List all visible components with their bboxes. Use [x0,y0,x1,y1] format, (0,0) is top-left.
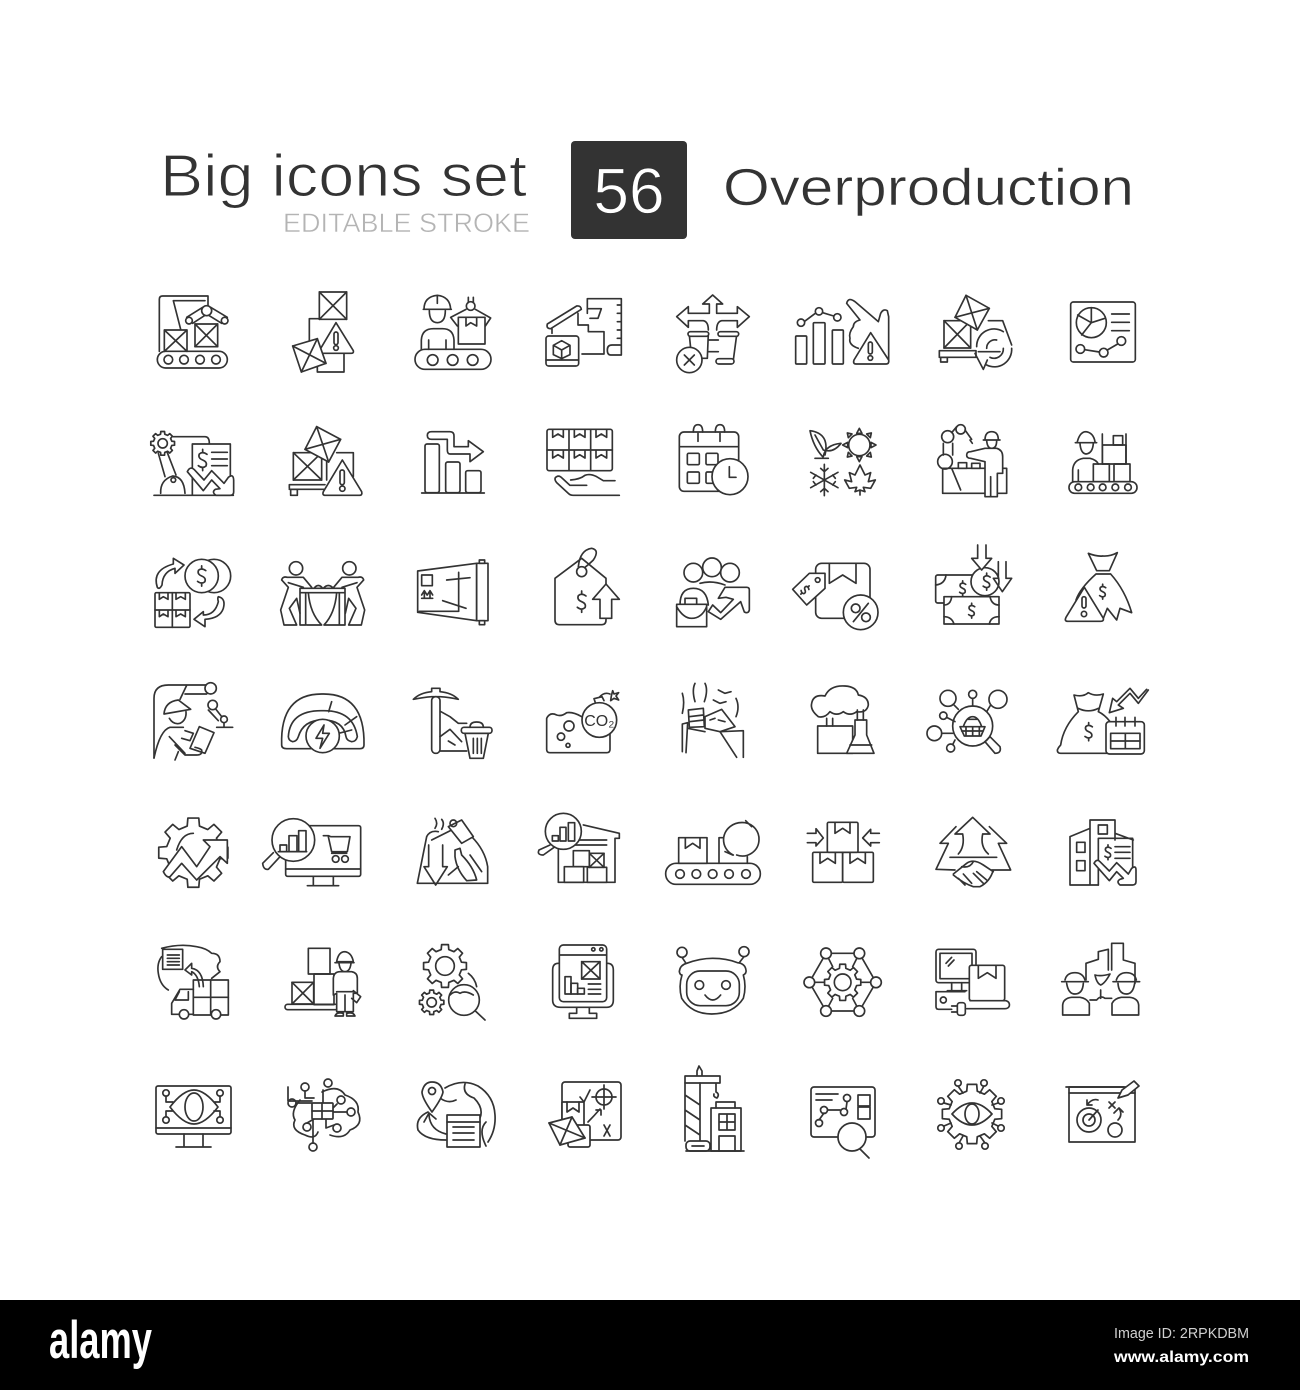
icon: price tag rising [555,548,619,625]
icon: globe with location and document [417,1082,495,1147]
icon: gear network [804,948,881,1016]
icon: monitor with eye [156,1086,231,1147]
subtitle: editable stroke: EDITABLE STROKE [283,208,530,238]
icon: strategy board with boxes [549,1082,621,1147]
icon: dashboard pie [1071,302,1135,362]
icon: computer and package [936,949,1009,1015]
icon: energy gauge [282,694,364,753]
icon panel: row 7 [156,1066,1139,1158]
icon: market research network [927,690,1007,753]
icon: worker with boxes on belt [1069,432,1137,493]
icon: robot arm on conveyor [157,296,228,368]
icon: gears under magnifier [419,945,485,1020]
icon: business team growth [677,558,749,627]
icon: data analysis card [811,1087,875,1158]
icon: delivery truck logistics [158,945,228,1019]
icon: burning waste pile [682,683,743,757]
icon: handshake and growth arrows [936,817,1011,887]
footer bar [0,1300,1300,1390]
icon: hand holding boxes [547,429,619,495]
badge: 56 [571,141,687,239]
icon: boxes to money exchange [155,558,231,627]
icon: smiling robot [677,947,749,1014]
icon: conveyor cycle [666,821,760,884]
icon: ai brain chip [288,1079,360,1151]
icon: pallet recycling [939,295,1012,369]
icon: 3d printer [546,299,621,366]
icon: waste mountain [417,818,488,885]
icon: target strategy board [1066,1081,1139,1142]
icon: stacked boxes warning [293,292,353,372]
heading: overproduction: Overproduction [723,159,1134,217]
icon: gear with growth arrow [159,818,228,887]
icon: warehouse analysis [538,813,619,882]
icon: gear with eye network [938,1080,1004,1149]
icon: pickaxe and trash [413,688,492,758]
icon: factory pollution [811,686,874,753]
icon: company costs decline [1070,820,1136,885]
icon: crane and building [685,1066,744,1151]
icon: pallet overload warning [289,427,362,495]
icon: co2 bomb: CO₂ [584,713,614,730]
badge: 56: 56 [593,155,665,227]
icon panel: rows 1 to 3, columns 1 to 4 [151,292,621,627]
icon panel: rows 1 to 3, columns 5 to 8 [677,295,1137,630]
icon: computer app charts [553,945,613,1018]
icon: co2 bomb [547,691,619,753]
title: big icons set: Big icons set [160,143,527,209]
icon: compressed boxes [807,822,879,882]
icon: falling money [936,545,1012,624]
icon: declining bar chart [422,432,484,493]
icon: workers and sustainable plant [1062,943,1140,1015]
icon: engineer with robot arm [154,683,233,760]
icon: four seasons [810,428,876,496]
icon: worker and conveyor [415,295,491,369]
logo: alamy: alamy [49,1311,152,1370]
icon: tug of war over table [281,562,365,625]
icon: worker with stock [285,948,361,1016]
icon: calendar and clock [679,425,748,495]
icon: robot arm costs [151,431,234,495]
icon: demand chart warning [796,300,889,364]
icon: worker at robotic line [938,425,1007,497]
website: www.alamy.com [1113,1349,1249,1366]
icon: discount box [793,563,878,630]
icon: money bag and calendar decline [1057,688,1148,754]
icon: stretch film wrap [418,560,488,625]
icon panel: rows 4 to 6, columns 5 to 8 [666,683,1148,1016]
icon panel: rows 4 to 6, columns 1 to 4 [154,683,619,1020]
icon: torn money bag warning [1065,553,1132,621]
icon: online market analysis [263,819,361,886]
header [160,141,1134,239]
icon: binoculars and direction arrows [677,295,749,373]
image id: Image ID: 2RPKDBM [1114,1325,1249,1342]
